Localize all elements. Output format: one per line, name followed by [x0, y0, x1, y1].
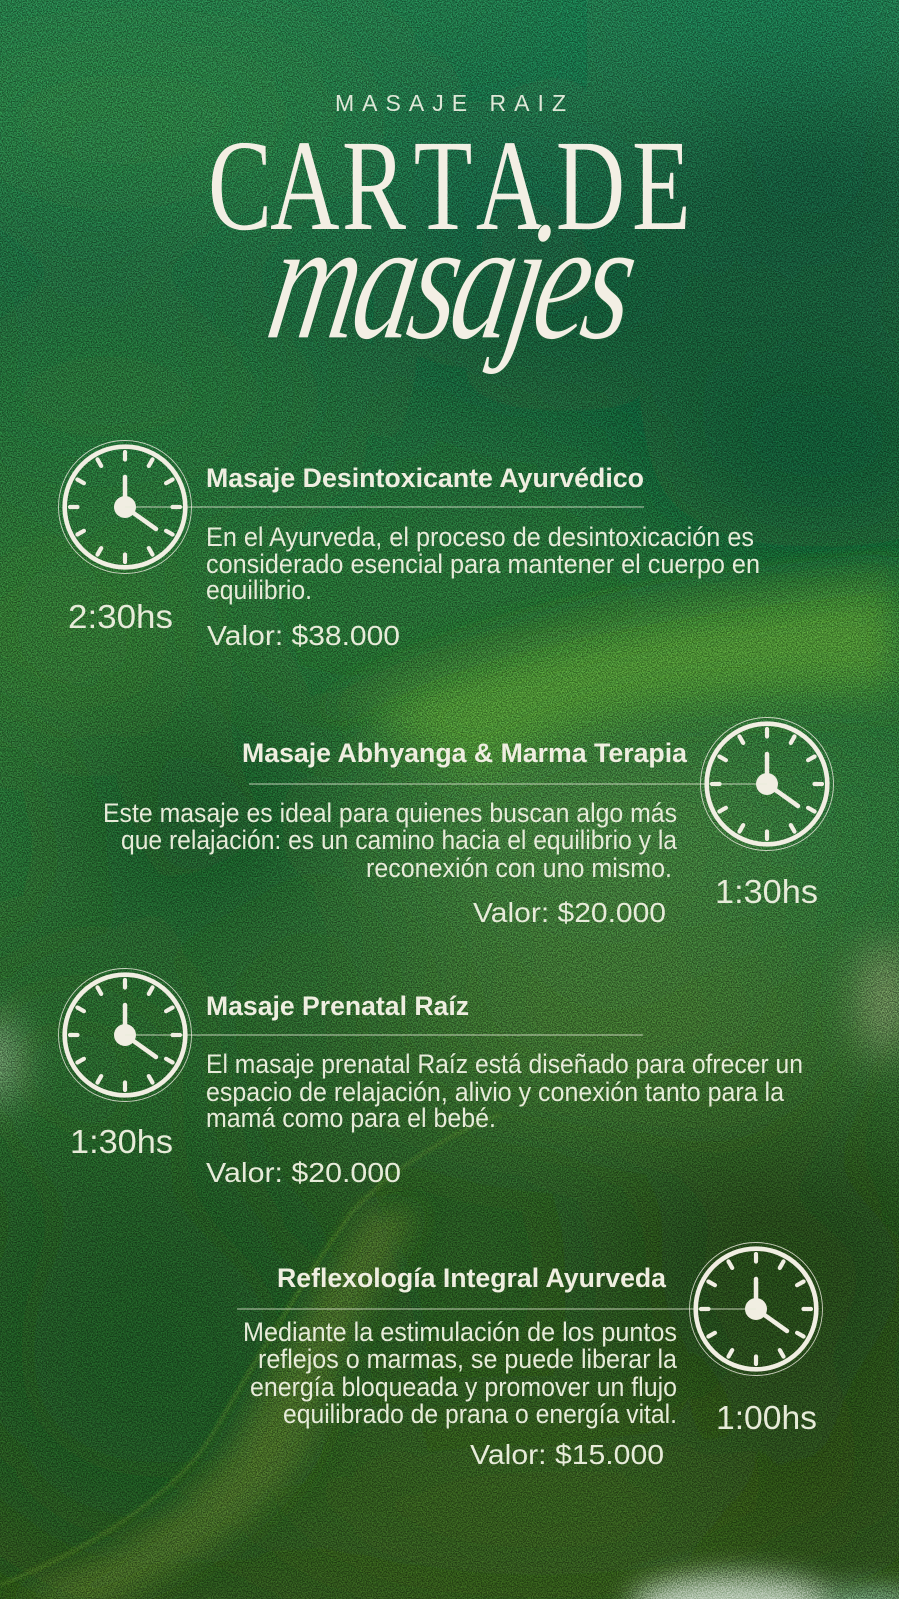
description: El masaje prenatal Raíz está diseñado para ofrecer un: [206, 1049, 803, 1079]
price: Valor: $20.000: [206, 1157, 401, 1188]
service 2: masaje abhyanga: [103, 718, 834, 928]
service 3: masaje prenatal: [58, 968, 803, 1188]
description: equilibrado de prana o energía vital.: [283, 1399, 677, 1429]
divider line: [249, 783, 767, 785]
description: [243, 1317, 677, 1429]
description: considerado esencial para mantener el cuerpo en: [206, 549, 760, 579]
service name: Masaje Abhyanga & Marma Terapia: [242, 738, 687, 768]
duration: 1:30hs: [715, 873, 818, 910]
service 1: masaje desintoxicante: [58, 440, 760, 651]
divider line: [125, 506, 644, 508]
description: que relajación: es un camino hacia el equilibrio y la: [121, 825, 677, 855]
clock icon: 2:30hs: [58, 440, 192, 574]
description: reflejos o marmas, se puede liberar la: [258, 1344, 677, 1374]
price: Valor: $20.000: [473, 897, 666, 928]
description: [103, 798, 677, 883]
description: En el Ayurveda, el proceso de desintoxicación es: [206, 522, 754, 552]
divider line: [237, 1308, 756, 1310]
title: carta de: CARTADE: [208, 113, 691, 257]
price: Valor: $38.000: [207, 620, 400, 651]
clock icon: 1:30hs: [700, 718, 834, 850]
service name: Reflexología Integral Ayurveda: [277, 1263, 666, 1293]
service 4: reflexología integral: [237, 1242, 822, 1470]
clock icon: 1:30hs: [58, 968, 192, 1102]
description: Mediante la estimulación de los puntos: [243, 1317, 677, 1347]
price: Valor: $15.000: [470, 1439, 664, 1470]
description: [206, 1049, 803, 1133]
description: equilibrio.: [206, 575, 312, 605]
description: reconexión con uno mismo.: [366, 853, 672, 883]
clock icon: 1:00hs: [690, 1242, 822, 1376]
description: espacio de relajación, alivio y conexión tanto para la: [206, 1077, 784, 1107]
description: energía bloqueada y promover un flujo: [250, 1372, 677, 1402]
service name: Masaje Desintoxicante Ayurvédico: [206, 463, 644, 493]
duration: 1:30hs: [70, 1123, 173, 1160]
duration: 2:30hs: [68, 598, 173, 635]
description: mamá como para el bebé.: [206, 1103, 496, 1133]
description: Este masaje es ideal para quienes buscan algo más: [103, 798, 677, 828]
description: [206, 522, 760, 605]
eyebrow: brand name: MASAJE RAIZ: [335, 90, 566, 116]
title: masajes: masajes: [256, 185, 652, 375]
duration: 1:00hs: [716, 1399, 817, 1436]
service name: Masaje Prenatal Raíz: [206, 991, 469, 1021]
divider line: [125, 1034, 643, 1036]
